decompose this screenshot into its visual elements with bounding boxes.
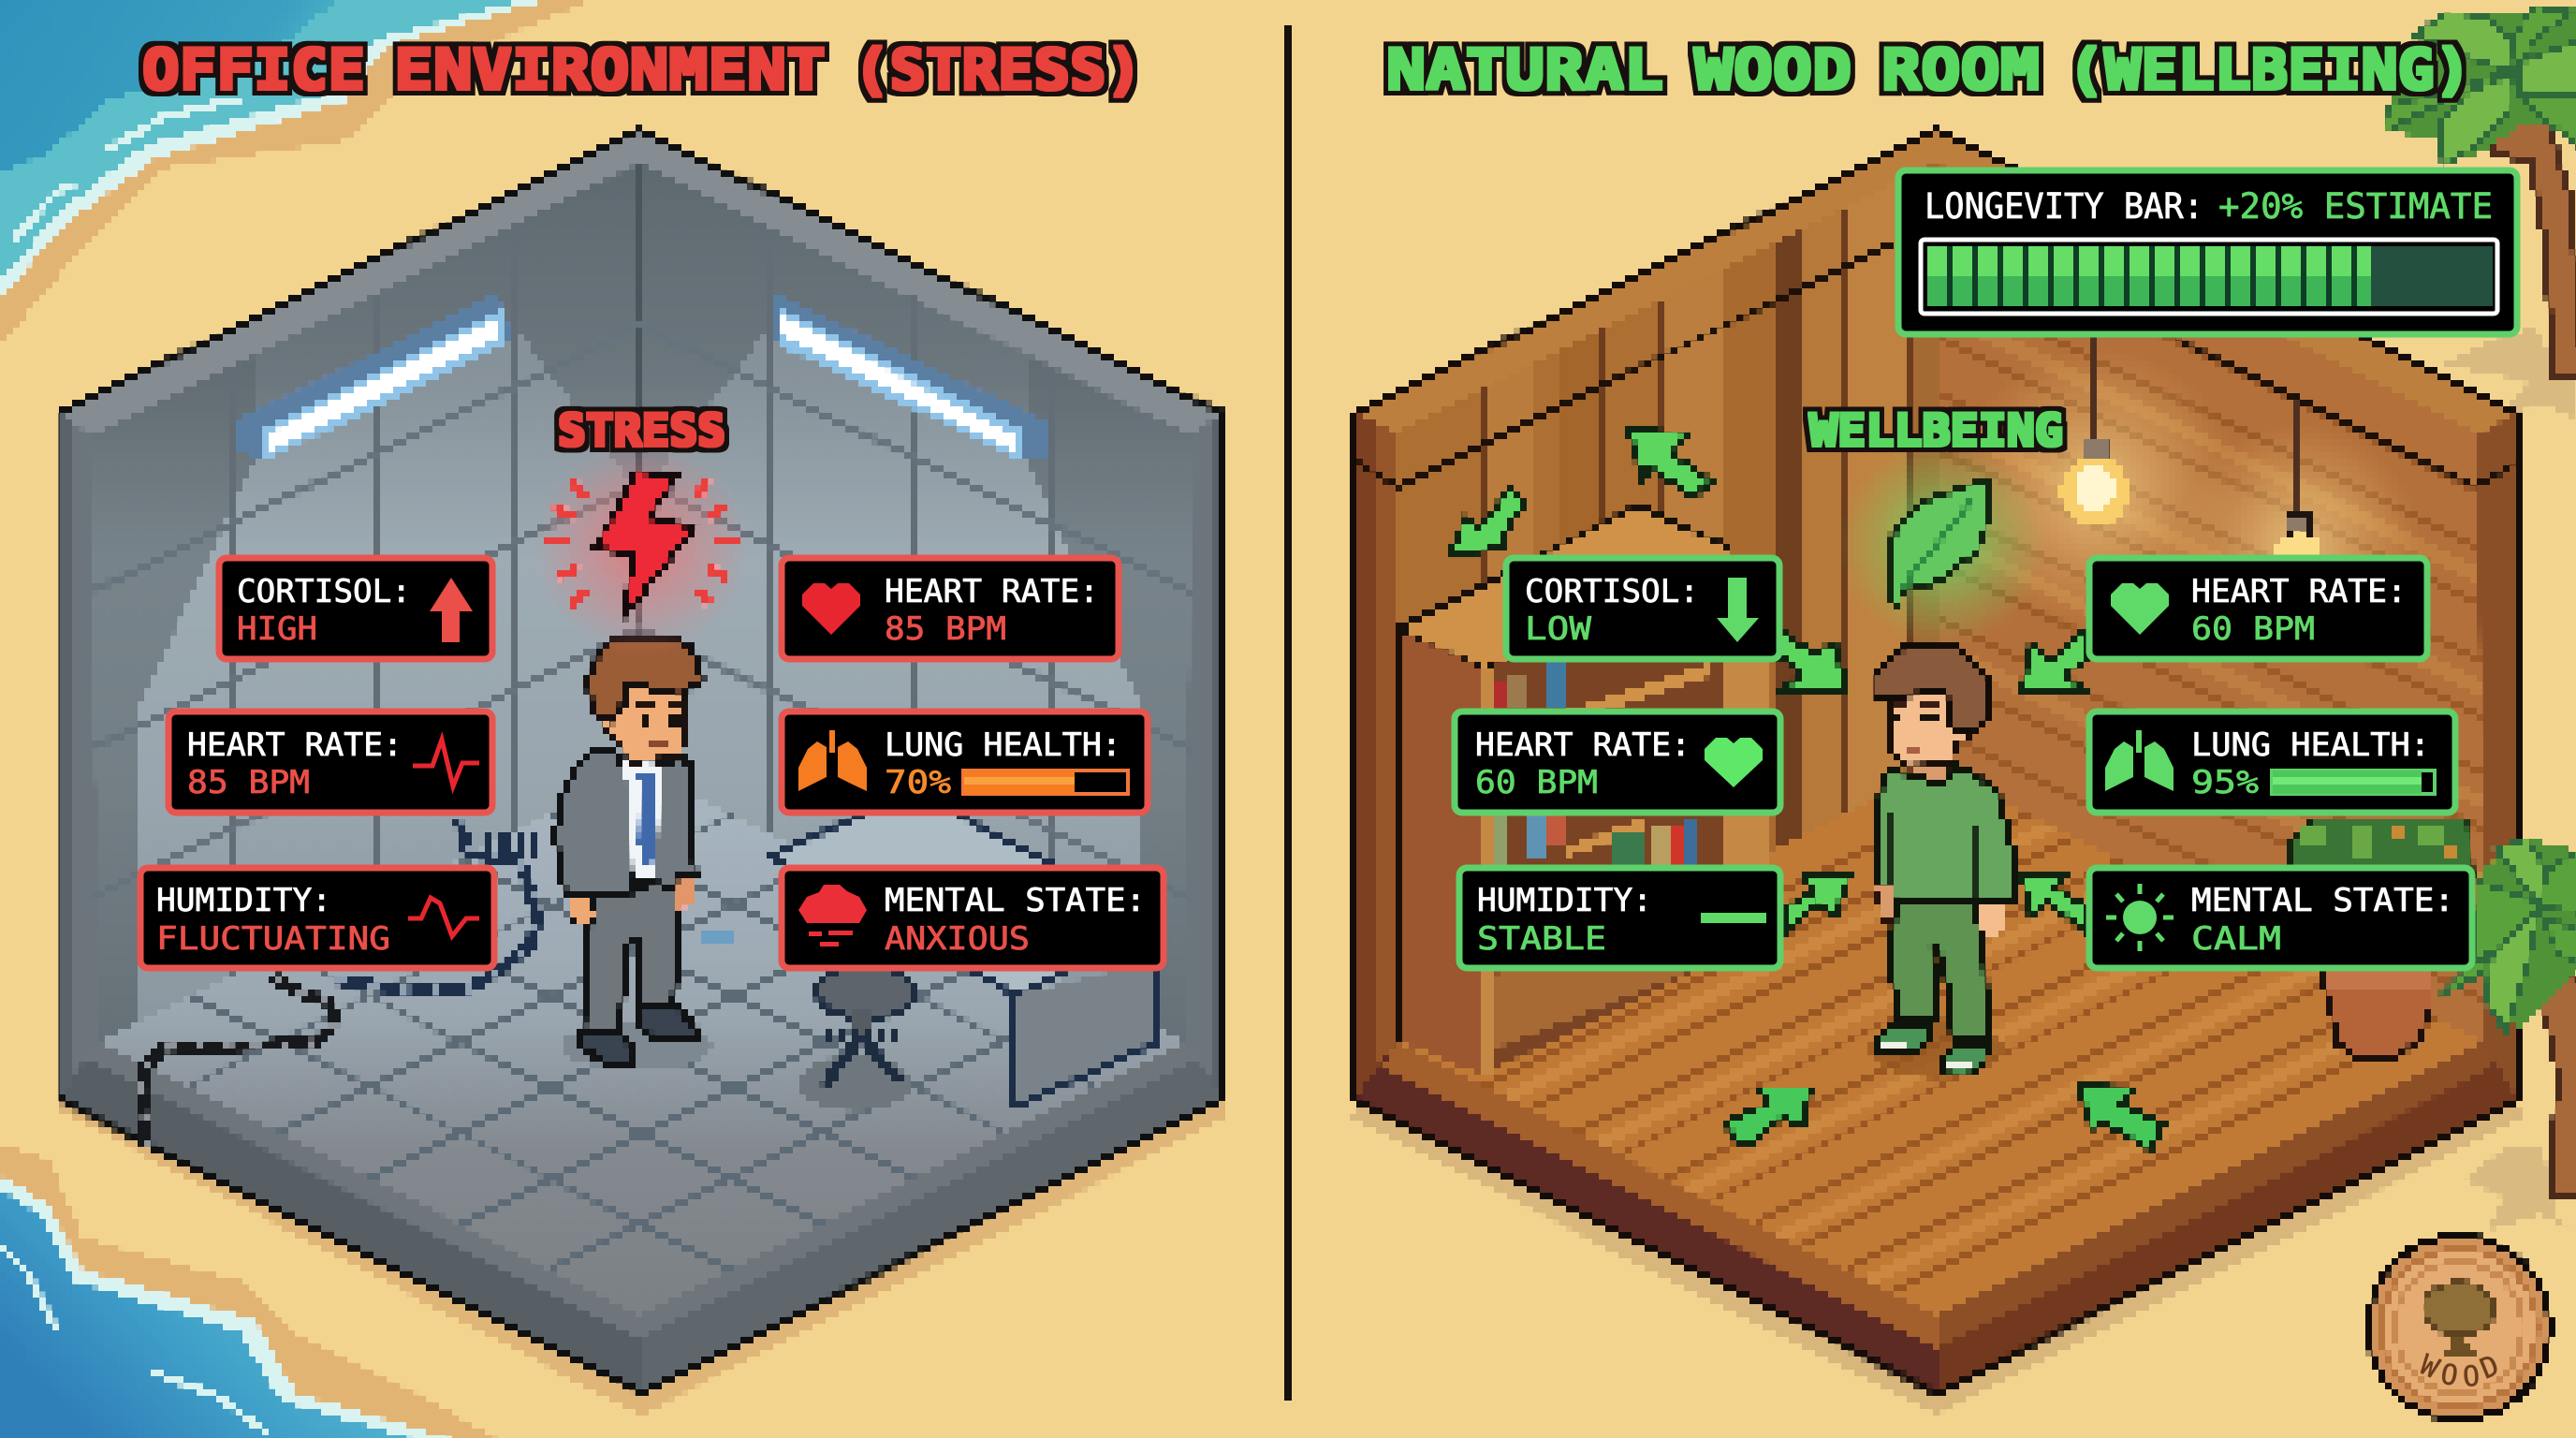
outer wall strips [1355,413,1395,1099]
outline [1355,130,2518,1393]
panel: mental state calm [2089,868,2472,968]
text: MENTAL STATE: [885,882,1146,919]
icon: lungs [798,730,867,791]
text: longevity label: LONGEVITY BAR: [1925,186,2203,227]
tie [635,770,658,864]
outer wall strips [71,421,98,1077]
panel: heart rate left green: 60 BPM [1475,764,1598,801]
floor cables [143,817,543,1149]
sweater [1875,765,2012,902]
text: LUNG HEALTH: [2191,726,2430,764]
title: office environment: OFFICE [142,37,365,103]
floor [98,769,1187,1315]
text: HEART RATE: [885,573,1099,610]
palm shadow on sand: lower [2464,1148,2576,1235]
icon: pulse [413,740,479,786]
panel: heart rate right green [2089,558,2427,659]
icon: storm cloud [798,885,867,946]
panel: heart rate right red: 85 BPM [885,610,1006,648]
arrow: mental state to person [2022,873,2086,932]
text: HEART RATE: [187,726,402,764]
hair [1874,646,1989,733]
calm person in green [1874,646,2012,1075]
title: office environment: ENVIRONMENT [394,37,826,103]
title: natural wood room: WOOD [1694,37,1852,103]
icon: lungs [2105,730,2174,791]
panel: cortisol low [1506,558,1779,659]
stressed office worker [555,637,702,1065]
icon: up arrow [430,578,473,642]
panel: lung health green: 95% [2191,764,2259,801]
icon: glowing leaf [1839,440,2045,646]
trunk [2527,961,2576,1196]
arrow: up-left on wall [1629,430,1711,497]
heading: stress label: STRESS [558,405,725,457]
icon: sun [2106,884,2174,951]
progress bar 95% [2272,770,2435,794]
panel: heart rate left red [168,712,492,813]
shelf side [1397,629,1482,1076]
divider [1284,25,1292,1401]
text: MENTAL STATE: [2191,882,2454,919]
fascia lines [1357,243,2516,486]
shelf top [1397,506,1730,669]
neck [1916,766,1950,786]
books [1493,665,1699,865]
outline [59,130,1222,1393]
title: office environment: (STRESS) [854,37,1142,103]
progress bar 70% [963,770,1128,794]
wood coin badge [2368,1236,2550,1419]
right wall planks [1937,159,2489,1049]
wellbeing man shadow [1868,1019,2003,1078]
wood room [1355,130,2518,1393]
trunk [2490,100,2576,377]
icon: flat line [1701,913,1766,923]
jacket [555,752,695,896]
panel: heart rate right green: 60 BPM [2191,610,2315,648]
panel: humidity fluctuating [140,868,494,968]
panel: heart rate left red: 85 BPM [187,764,310,801]
hair [588,637,702,721]
text: estimate: +20% ESTIMATE [2218,186,2493,227]
arrow: humidity to person [1787,873,1851,932]
icon: heart [2111,583,2169,635]
icon: heart [802,583,860,635]
palm tree: upper right [2385,7,2576,377]
hanging lamp: right [2274,399,2322,571]
icon: stress lightning bolt [534,440,749,655]
panel: cortisol high [219,558,492,659]
fronds [2385,7,2576,166]
base faces [1355,1042,1937,1393]
silhouette [1355,130,2518,1393]
title: natural wood room: NATURAL [1386,37,1663,103]
panel: mental state anxious [782,868,1164,968]
panel: cortisol low: LOW [1525,610,1592,648]
panel: longevity bar [1898,170,2517,334]
roof band [1355,130,2518,433]
icon: tree [2423,1283,2495,1359]
icon: wave [408,898,479,936]
panel: mental state calm: CALM [2191,920,2281,958]
fronds [2438,838,2576,1032]
floor tile grid [188,814,1096,1269]
wall shade [91,356,255,1042]
hanging lamp: left [2060,337,2130,526]
shelves [1565,662,1713,723]
office room [59,130,1222,1393]
roof band [59,130,1222,435]
hands [1875,887,1893,920]
arrow: floor left [1723,1088,1811,1148]
shoes [582,1033,632,1065]
text: LUNG HEALTH: [885,726,1121,764]
panel: lung health green [2089,712,2455,813]
shelf front [1482,599,1730,1076]
icon: down arrow [1717,578,1759,642]
palm shadow on sand: upper [2440,328,2576,418]
arrow: down-left on wall [1450,489,1526,557]
arrow: floor right [2079,1086,2165,1150]
light cones [139,323,640,1020]
panel: cortisol high: HIGH [237,610,317,648]
panel: heart rate left green [1455,712,1780,813]
text: HUMIDITY: [156,882,331,919]
panel: humidity stable [1459,868,1780,968]
shoes [1875,1023,1931,1053]
panel: lung health orange: 70% [885,764,951,801]
base faces [59,1042,640,1393]
text: CORTISOL: [1525,573,1699,610]
title: natural wood room: (WELLBEING) [2068,37,2471,103]
left wall planks [1396,164,1939,852]
office chair [798,966,915,1111]
text: HUMIDITY: [1477,882,1652,919]
room shadow: wood room [1352,1099,2522,1416]
panel: heart rate right red [782,558,1119,659]
wall seams [234,163,1051,976]
palm tree: lower right [2438,838,2576,1196]
pants [1891,899,1987,1042]
icon: heart [1705,738,1763,787]
pot [2321,971,2431,1061]
face [602,682,686,763]
desk [772,789,1161,1108]
beach: bottom-left shoreline [0,1143,501,1438]
text: HEART RATE: [1475,726,1690,764]
foliage [2287,819,2471,873]
potted plant [2287,819,2471,1061]
text: HEART RATE: [2191,573,2407,610]
title: natural wood room: ROOM [1881,37,2040,103]
panel: humidity fluctuating: FLUCTUATING [156,920,390,958]
facial features [634,701,683,746]
coin rim [2368,1236,2550,1419]
wood label on coin: WOOD [2415,1349,2504,1394]
face [1889,693,1972,766]
floor planks [1437,791,2437,1293]
arrow: cortisol to person [1781,630,1847,690]
fluorescent light: left [234,292,513,461]
room shadow: office [56,1099,1224,1416]
text: CORTISOL: [237,573,411,610]
panel: lung health orange [782,712,1148,813]
heading: wellbeing label: WELLBEING [1809,405,2063,457]
floor [1395,769,2482,1315]
pants [583,880,677,1030]
shirt [620,758,660,875]
left wall [91,163,640,1042]
beach: top-left shoreline [0,0,592,346]
stress man shadow [562,1020,711,1071]
hands [569,896,596,930]
fluorescent light: right [772,292,1046,461]
pill on floor [699,929,732,944]
panel: humidity stable: STABLE [1477,920,1606,958]
facial features [1891,704,1939,756]
outer silhouette [59,130,1222,1393]
panel: mental state anxious: ANXIOUS [885,920,1030,958]
bookshelf [1397,506,1769,1076]
progress bar [1921,240,2497,314]
right wall [640,163,1191,1042]
arrow: heart rate to person [2022,630,2089,690]
